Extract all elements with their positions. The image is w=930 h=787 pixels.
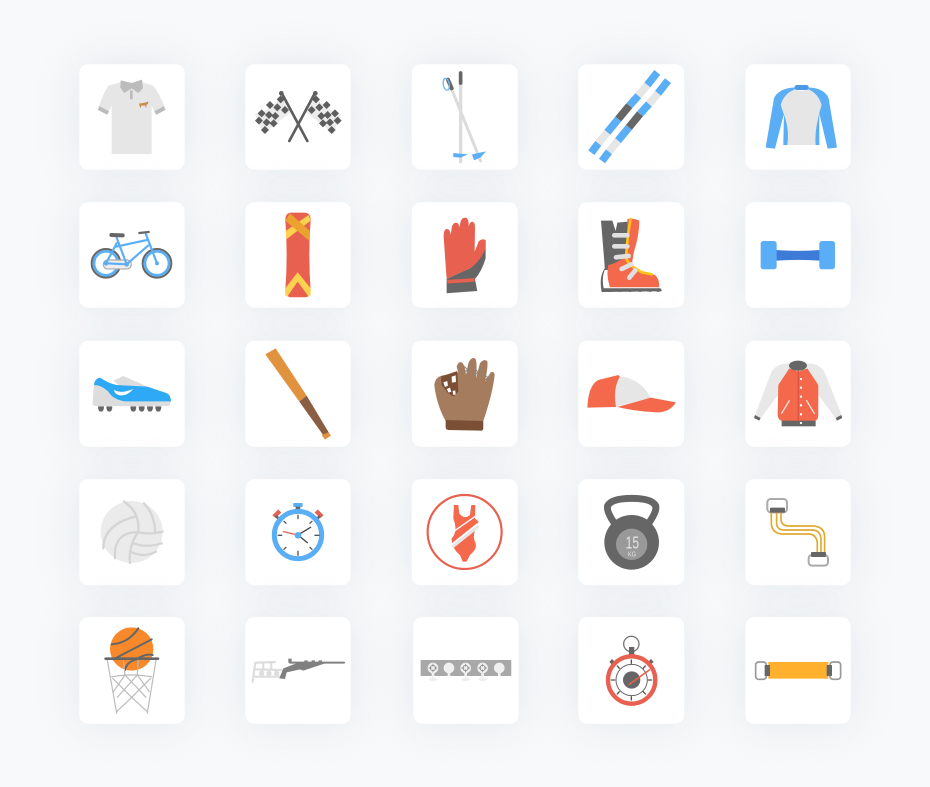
card: stopwatch blue — [245, 479, 351, 586]
card: baseball bat — [245, 340, 351, 447]
icon: cap — [587, 375, 676, 412]
icon: biathlon rifle — [253, 659, 344, 682]
icon: kettlebell: KG — [628, 550, 636, 559]
card: red stopwatch — [578, 617, 684, 724]
icon: snowboard — [285, 213, 311, 297]
icon: kettlebell — [604, 498, 659, 570]
icon: ski poles — [442, 73, 486, 162]
card: bicycle — [79, 202, 185, 308]
card: rash guard — [745, 64, 851, 170]
icon: polo shirt — [98, 80, 165, 154]
icon: kettlebell: 15 — [626, 532, 639, 552]
card: ski glove — [412, 202, 518, 308]
icon: volleyball — [101, 501, 163, 563]
card: basketball — [79, 617, 185, 724]
icon: baseball glove — [434, 358, 495, 431]
icon: dumbbell — [761, 241, 835, 269]
icon: swimsuit in circle — [428, 495, 502, 569]
card: varsity jacket — [745, 340, 851, 447]
card: ski poles — [412, 64, 518, 170]
card: skis — [578, 64, 684, 170]
card: ski boot — [578, 202, 684, 308]
card: dumbbell — [745, 202, 851, 308]
card: volleyball — [79, 479, 185, 586]
icon: bat — [265, 348, 331, 440]
card: baseball cap — [578, 340, 684, 447]
icon: cleat — [93, 376, 171, 412]
icon: blue stopwatch — [272, 503, 324, 559]
card: resistance band — [745, 479, 851, 586]
icon: basketball hoop — [106, 627, 158, 713]
card: rifle — [245, 617, 351, 724]
card: yoga strap — [745, 617, 851, 724]
icon: jacket — [754, 361, 842, 426]
card: swimsuit — [412, 479, 518, 586]
icon: red stopwatch — [608, 636, 655, 704]
card: polo shirt — [79, 64, 185, 170]
icon: glove — [444, 218, 486, 293]
icon: expander bands — [767, 499, 828, 566]
icon: crossed checkered flags — [255, 91, 342, 141]
card: racing flags — [245, 64, 351, 170]
icon: bicycle — [92, 232, 171, 278]
icon: long sleeve shirt — [766, 85, 837, 149]
card: shooting targets — [413, 617, 519, 724]
card: football cleat — [79, 340, 185, 447]
card: kettlebell — [578, 479, 684, 586]
card: baseball glove — [412, 340, 518, 447]
icon: yellow resistance strap — [756, 662, 841, 679]
icon: biathlon target strip — [421, 660, 511, 681]
icon: skis — [591, 72, 668, 161]
card: snowboard — [245, 202, 351, 308]
icon: ski boot — [601, 219, 662, 292]
